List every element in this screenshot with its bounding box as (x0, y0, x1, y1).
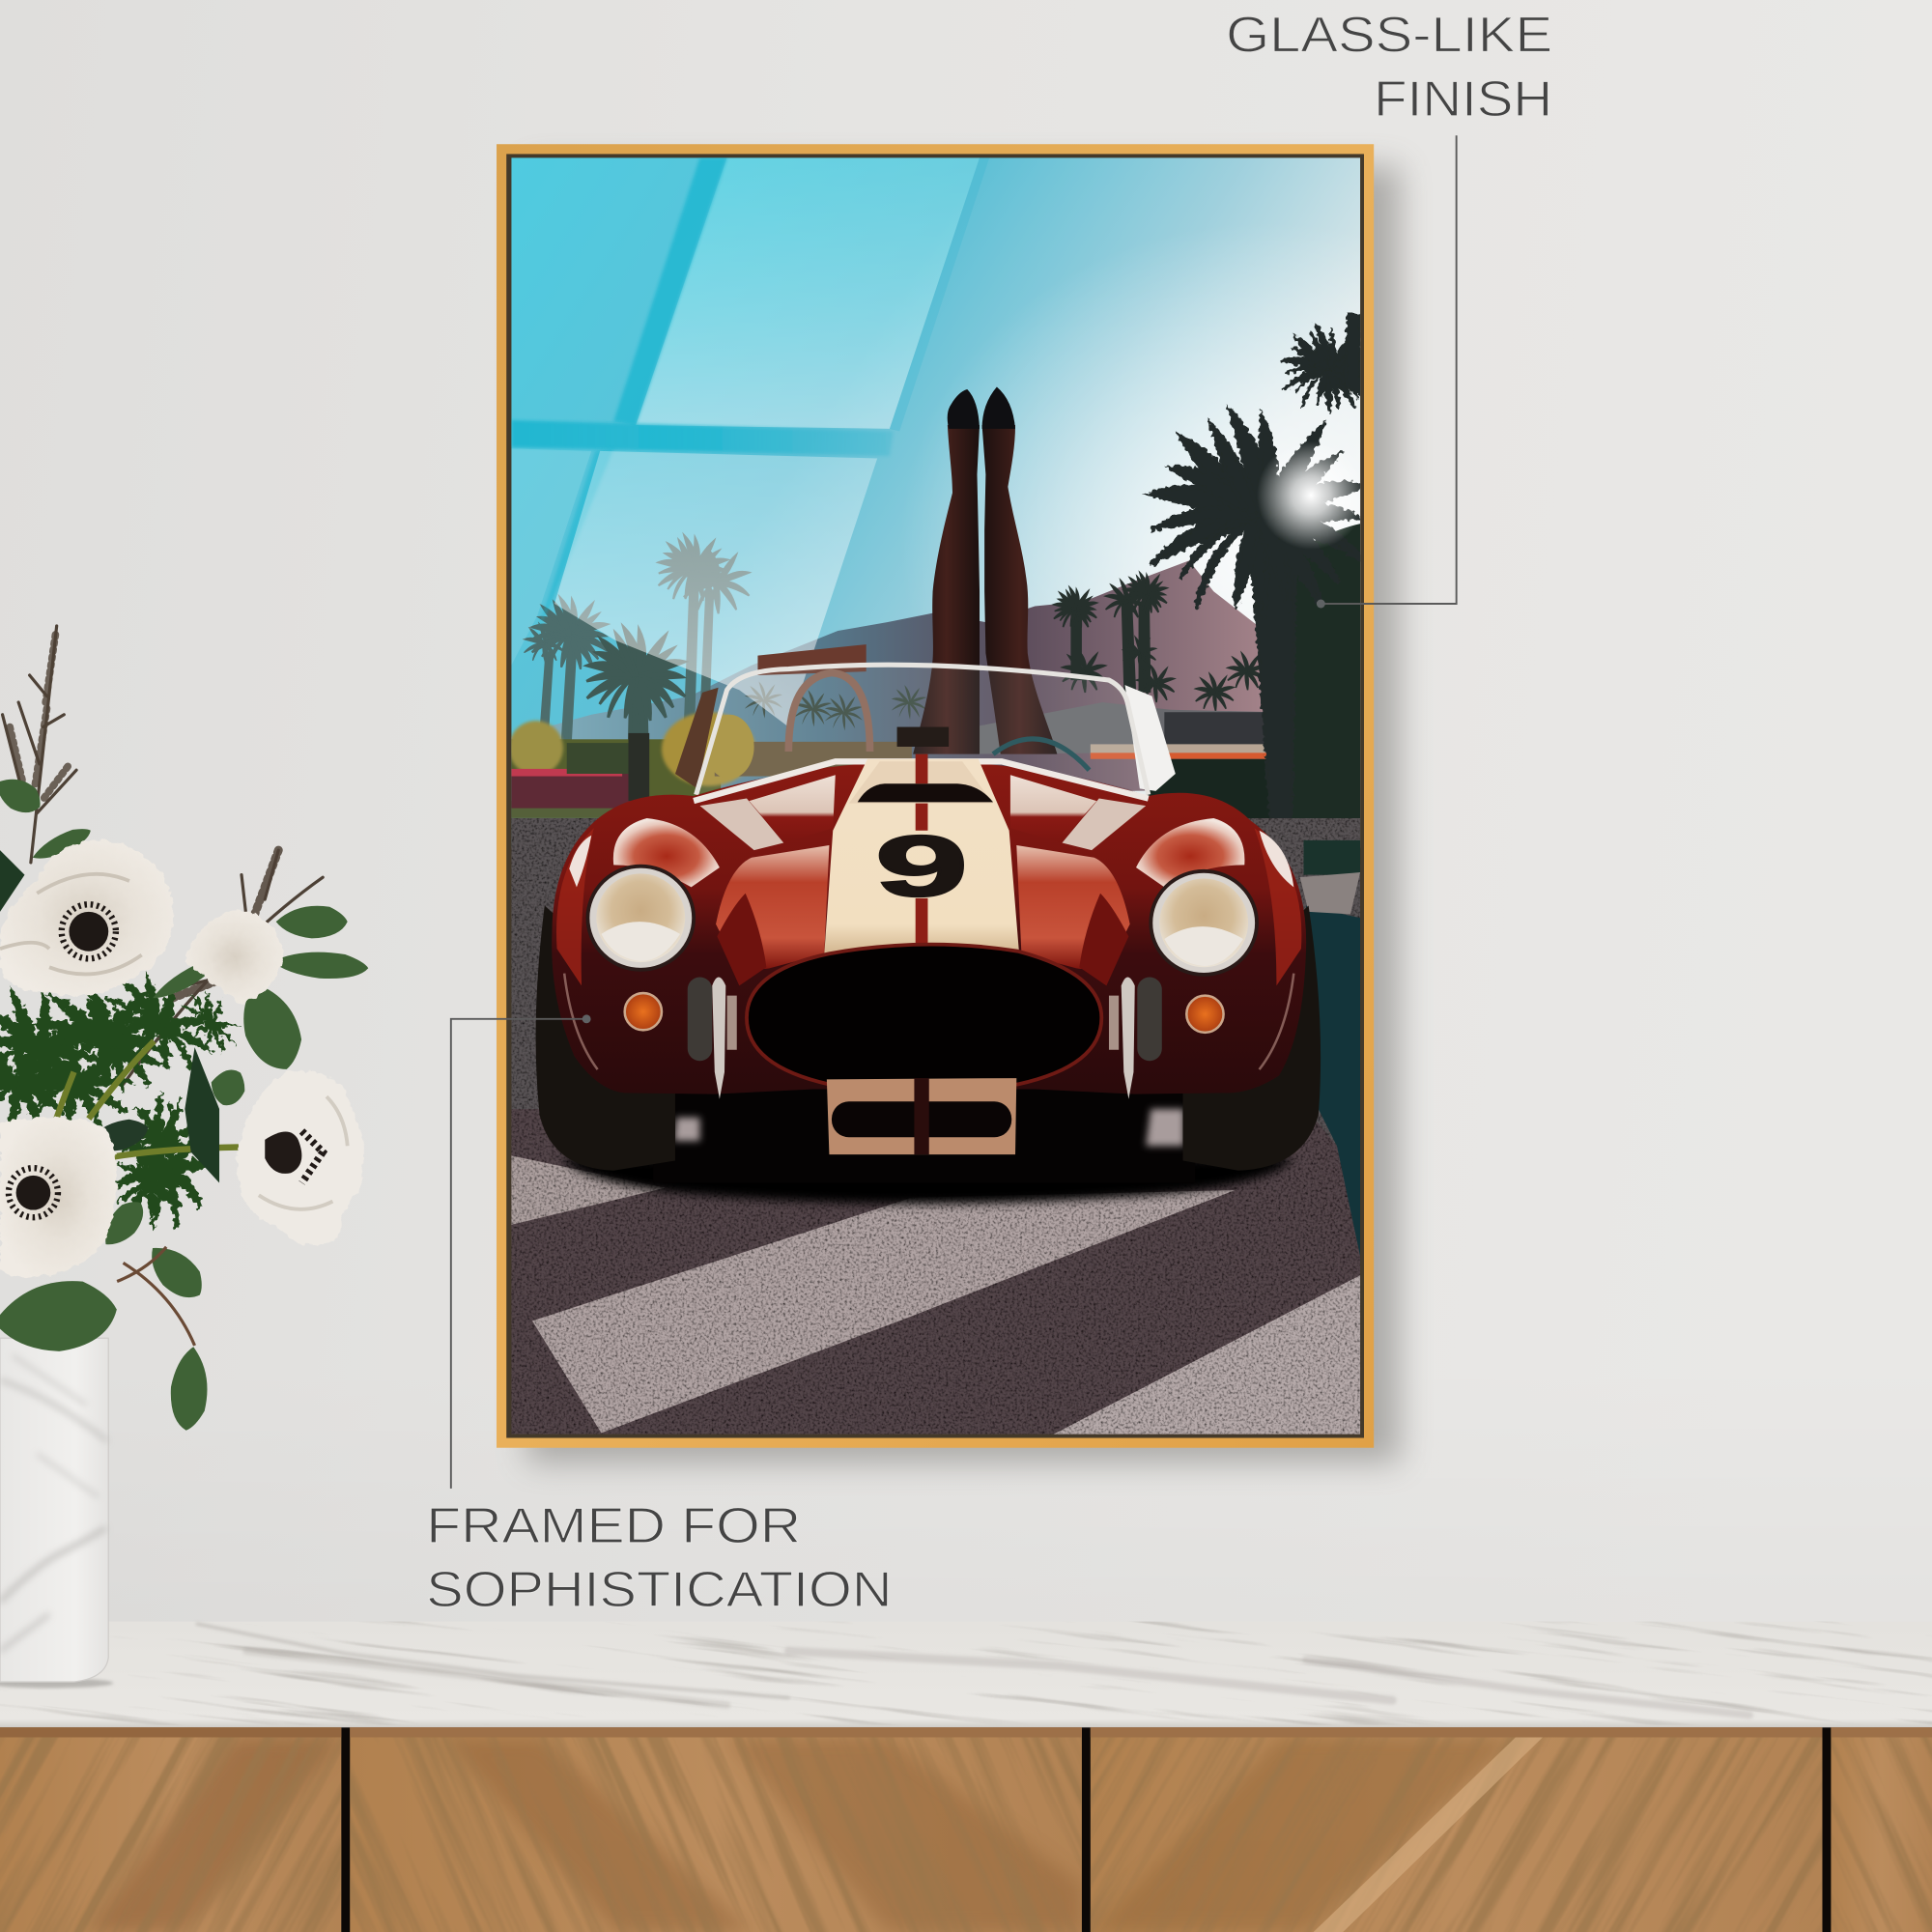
large dark tree right (1291, 524, 1360, 818)
road upper area (512, 818, 1360, 1146)
left tyre (536, 906, 675, 1171)
crossing stripe centre (532, 1190, 1235, 1433)
right fender highlight (1136, 818, 1244, 887)
left bumper overrider (712, 977, 725, 1099)
left fender highlight (613, 818, 720, 887)
crossing stripe small (511, 1155, 666, 1225)
anemone rear bud (185, 909, 283, 1005)
wood cabinet (0, 1727, 1932, 1932)
left headlight (587, 867, 694, 970)
left mesh vent (688, 977, 712, 1061)
number 9: 9 (875, 818, 969, 915)
right turn signal (1186, 996, 1224, 1033)
crossing stripe lower right (1054, 1275, 1360, 1435)
cabinet door 1 (0, 1727, 341, 1932)
mountains (511, 560, 1282, 801)
dash box (897, 727, 949, 747)
left wing reflection (556, 828, 594, 985)
right tyre (1182, 906, 1321, 1171)
house roof right (980, 702, 1270, 818)
left cowl panel (750, 775, 836, 842)
gold frame (497, 144, 1374, 1448)
big palm right (1142, 313, 1360, 818)
floral arrangement (0, 626, 369, 1432)
inner dark gap (506, 154, 1364, 1438)
right hood panel (1016, 845, 1130, 969)
lower body edge highlights (564, 974, 1293, 1069)
background palms right (1052, 570, 1265, 711)
lawn right (1303, 840, 1360, 875)
side wind deflector left (675, 688, 719, 788)
car body (552, 761, 1306, 1094)
eucalyptus leaves (0, 770, 369, 1432)
anemone right (237, 1071, 363, 1245)
road patch under car left (674, 1118, 699, 1141)
teal shadow right of road (1306, 906, 1360, 1263)
framed artwork (497, 144, 1374, 1448)
green stems (55, 1041, 241, 1158)
roll bar and headrest (757, 644, 870, 752)
callout: glass-like finish (1226, 8, 1552, 608)
pavement patch right (1300, 872, 1360, 914)
chrome windshield base (694, 761, 1149, 801)
callout: framed for sophistication (426, 1014, 892, 1618)
background palms left (522, 531, 752, 740)
frame drop shadow (527, 166, 1400, 1463)
dried sprigs (3, 626, 323, 1084)
label text: GLASS-LIKE (1226, 8, 1552, 64)
label text line 2: SOPHISTICATION (426, 1562, 892, 1618)
ground shadow (560, 1158, 1293, 1204)
right wing reflection (1254, 828, 1301, 985)
anemone top (0, 840, 174, 996)
windshield (696, 665, 1149, 795)
right cowl panel (1010, 775, 1096, 842)
steering wheel (993, 739, 1090, 770)
mid palm left (582, 622, 690, 740)
sky (511, 157, 1360, 848)
leader line (1322, 135, 1457, 604)
glass reflection panes (511, 157, 989, 727)
anemone lower (0, 1117, 117, 1277)
garden and hedges left (509, 712, 755, 818)
grille opening (747, 945, 1101, 1090)
right mesh vent (1137, 977, 1162, 1061)
left hood panel (716, 845, 829, 969)
car (536, 665, 1321, 1204)
leader dot (1317, 600, 1325, 608)
leader line (451, 1019, 585, 1489)
sky glow (931, 262, 1360, 794)
sun flare (1257, 441, 1365, 550)
right bumper overrider (1122, 977, 1135, 1099)
label text: FRAMED FOR (426, 1498, 801, 1554)
artwork picture (511, 157, 1360, 1435)
under car shadow (653, 1072, 1195, 1182)
marble vase (0, 1338, 108, 1682)
left turn signal (625, 993, 662, 1030)
hood scoop (849, 761, 993, 804)
windshield scenery (705, 681, 926, 779)
vase shadow (0, 1678, 113, 1688)
cabinet door 2 (350, 1727, 1082, 1932)
side wind deflector right (1125, 685, 1176, 791)
legs (913, 387, 1057, 754)
right headlight (1151, 871, 1257, 975)
cream racing stripe (824, 759, 1019, 953)
lower valance (827, 1078, 1016, 1154)
red centre stripe (916, 754, 927, 944)
marble countertop (0, 1622, 1932, 1727)
right bracket (1109, 996, 1119, 1050)
asphalt road (511, 1109, 1360, 1435)
cabinet door 4 (1831, 1727, 1932, 1932)
leader dot (582, 1014, 591, 1023)
eucalyptus twigs (117, 1247, 195, 1346)
road patch under car right (1146, 1109, 1184, 1146)
fern foliage (0, 957, 245, 1241)
cabinet door 3 (1091, 1727, 1822, 1932)
label text line 2: FINISH (1374, 71, 1552, 128)
left bracket (727, 996, 737, 1050)
